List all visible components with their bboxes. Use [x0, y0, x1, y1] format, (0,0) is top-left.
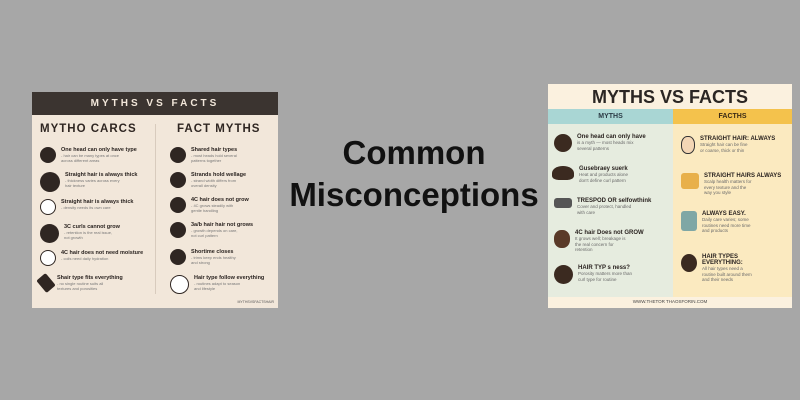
myths column: One head can only have	[577, 134, 646, 140]
left header bar	[32, 92, 278, 115]
facts column: STRAIGHT HAIR: ALWAYS	[700, 136, 775, 142]
left myth rows: not growth	[64, 235, 83, 240]
myths column: Heat and products alone	[579, 172, 628, 177]
right fact rows: and lifestyle	[194, 286, 215, 291]
right fact rows: - 4C grows steadily with	[191, 203, 233, 208]
right fact rows: Strands hold wellage	[191, 172, 246, 178]
facts column: or coarse, thick or thin	[700, 148, 744, 152]
left myth rows: - retention is the real issue,	[64, 230, 112, 235]
myths column: with care	[577, 210, 595, 214]
facts column: and their needs	[702, 277, 733, 282]
left myth rows	[37, 147, 143, 292]
myths column: several patterns	[577, 146, 609, 150]
myths column: the real concern for	[575, 242, 614, 246]
facts column	[673, 109, 792, 297]
facts column: ALWAYS EASY.	[702, 211, 746, 217]
footer url: WWW.THETOR THAOSFORIN.COM	[633, 299, 707, 304]
right fact rows: Shared hair types	[191, 147, 237, 153]
facts column: way you style	[704, 190, 731, 195]
left myth rows: One head can only have type	[61, 147, 137, 153]
myths header band: MYTHS	[598, 113, 623, 120]
right fact rows	[170, 147, 264, 294]
right fact rows: patterns together	[191, 158, 221, 163]
left myth rows: Straight hair is always thick	[61, 199, 133, 205]
left myth rows: - density needs its own care	[61, 205, 111, 210]
facts column: STRAIGHT HAIRS ALWAYS	[704, 173, 781, 179]
right fact rows: Shortime closes	[191, 249, 234, 255]
title: Common Misconceptions: Misconceptions	[289, 176, 539, 213]
myths column: curl type for routine	[578, 276, 617, 282]
myths column	[548, 109, 673, 297]
right fact rows: 4C hair does not grow	[191, 197, 249, 203]
left myth rows: - coils need daily hydration	[61, 256, 108, 261]
right title: MYTHS VS FACTS	[592, 87, 748, 107]
left myth rows: - thickness varies across every	[65, 178, 120, 183]
right fact rows: and strong	[191, 260, 210, 265]
right fact rows: - routines adapt to season	[194, 281, 240, 286]
facts column: All hair types need a	[702, 266, 743, 271]
left column heading: MYTHO CARCS	[40, 123, 137, 135]
right fact rows: Hair type follow everything	[194, 275, 264, 281]
left myth rows: - no single routine suits all	[57, 281, 103, 286]
facts column: routines need more time	[702, 222, 751, 228]
right fact rows: overall density	[191, 183, 217, 188]
right fact rows: not curl pattern	[191, 233, 218, 238]
left myth rows: - hair can be many types at once	[61, 153, 119, 158]
facts column: HAIR TYPES	[702, 254, 738, 260]
left myth rows: across different areas	[61, 158, 99, 163]
facts header band: FACTHS	[718, 113, 746, 120]
myths column: is a myth — most heads mix	[577, 140, 634, 145]
title: Common Misconceptions	[289, 134, 539, 213]
myths column: don't define curl pattern	[579, 178, 626, 182]
left myth rows: textures and porosities	[57, 286, 97, 291]
left myth rows: 3C curls cannot grow	[64, 224, 120, 230]
right fact rows: - growth depends on care,	[191, 228, 237, 233]
myths column: Cover and protect, handled	[577, 204, 631, 209]
title: Common Misconceptions: Common	[342, 134, 486, 171]
myths column: HAIR TYP s ness?	[578, 265, 630, 271]
myths column: Porosity matters more than	[578, 271, 632, 276]
right fact rows: gentle handling	[191, 208, 218, 213]
facts column: Scalp health matters for	[704, 179, 752, 184]
left header bar: MYTHS VS FACTS	[91, 98, 219, 109]
right fact rows: - most heads hold several	[191, 153, 237, 158]
facts column: routine built around them	[702, 272, 752, 276]
right column heading: FACT MYTHS	[177, 123, 260, 135]
myths column: retention	[575, 247, 593, 252]
facts column: every texture and the	[704, 184, 746, 190]
left myth rows: Straight hair is always thick	[65, 172, 137, 178]
panel: left myths vs facts infographic	[32, 92, 278, 308]
facts column: Straight hair can be fine	[700, 142, 748, 147]
right fact rows: - strand width differs from	[191, 178, 236, 183]
right fact rows: 3a/b hair hair not grows	[191, 222, 253, 228]
facts column: EVERYTHING:	[702, 260, 743, 266]
facts header band	[673, 109, 792, 124]
right fact rows: - trims keep ends healthy	[191, 255, 236, 260]
myths column: Gusebraey suerk	[579, 166, 628, 172]
myths header band	[548, 109, 673, 124]
left myth rows: hair texture	[65, 183, 85, 188]
left myth rows: 4C hair does not need moisture	[61, 250, 143, 256]
myths column: It grows well; breakage is	[575, 236, 626, 241]
left myth rows: Shair type fits everything	[57, 275, 123, 281]
panel: right myths vs facts infographic	[548, 84, 792, 308]
footer credit: MYTHSVSFACTSHAIR	[237, 300, 274, 304]
facts column: Daily care varies; some	[702, 217, 749, 222]
facts column: and products	[702, 228, 728, 233]
myths column: 4C hair Does not GROW	[575, 230, 644, 236]
myths column: TRESPOD OR selfowthink	[577, 198, 651, 204]
